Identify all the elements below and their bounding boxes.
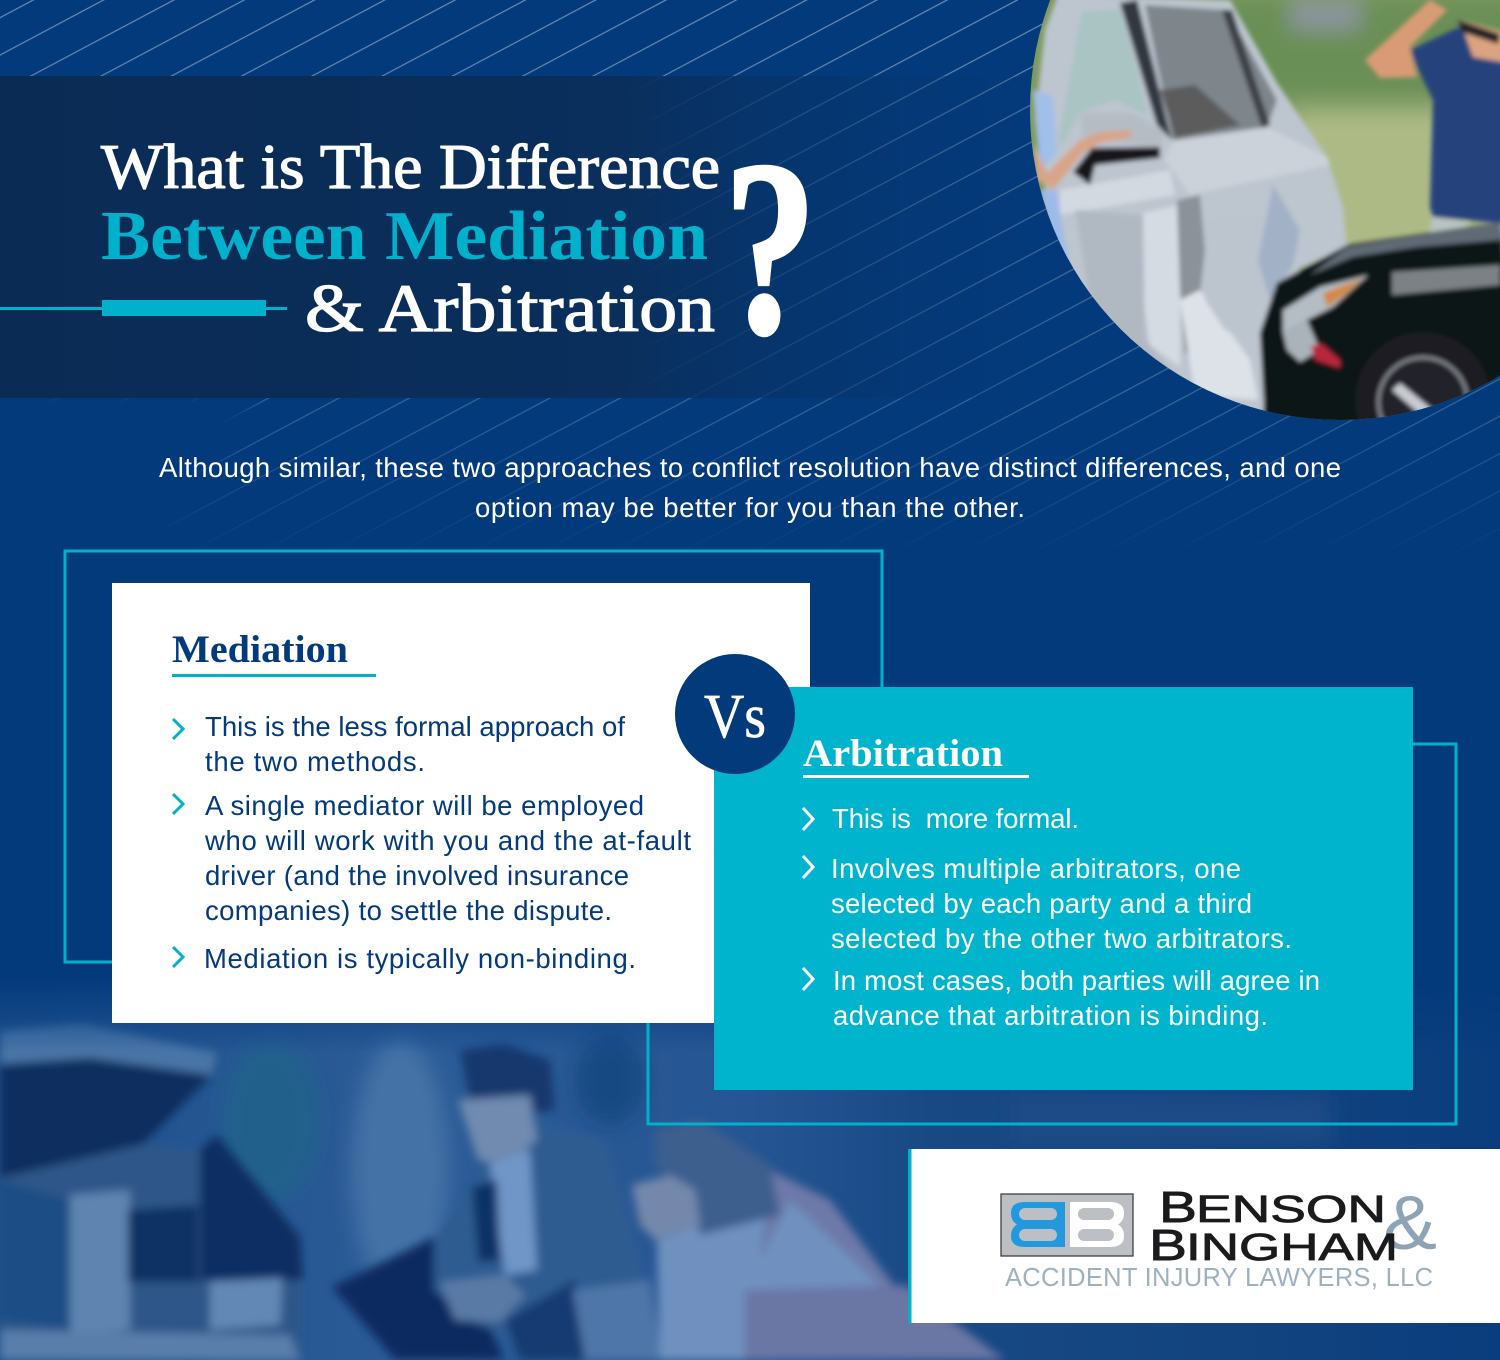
logo card bbox=[908, 1149, 1500, 1323]
woman: torso, scarf, hair, hand bbox=[652, 1198, 882, 1360]
logo wordmark: INGHAM bbox=[1186, 1227, 1398, 1269]
arbitration point 3: advance that arbitration is binding. bbox=[833, 1000, 1268, 1031]
intro text: option may be better for you than the other. bbox=[475, 492, 1025, 523]
mediation point 1: This is the less formal approach of bbox=[205, 711, 625, 742]
logo wordmark: B bbox=[1159, 1183, 1197, 1232]
mediation point 1: the two methods. bbox=[205, 746, 425, 777]
mediation point 2: driver (and the involved insurance bbox=[205, 860, 629, 891]
title line 1: What is The Difference bbox=[101, 132, 720, 202]
title line 2: Between Mediation bbox=[101, 198, 708, 275]
question mark: ? bbox=[724, 109, 816, 387]
panel: arbitration bbox=[714, 687, 1413, 1090]
woman at left bbox=[1033, 90, 1057, 170]
vs badge: Vs bbox=[704, 683, 766, 751]
silver car bbox=[1035, 0, 1347, 420]
mediation point 2: A single mediator will be employed bbox=[205, 790, 644, 821]
arbitration point 2: selected by each party and a third bbox=[831, 888, 1252, 919]
arbitration heading: Arbitration bbox=[803, 732, 1003, 775]
arbitration point 3 bbox=[803, 965, 1320, 1031]
frame: arbitration outline bbox=[648, 744, 1456, 1124]
intro text bbox=[159, 452, 1341, 523]
logo mark bbox=[1001, 1194, 1133, 1256]
side mirror bbox=[1082, 115, 1162, 146]
black car bbox=[1260, 222, 1500, 430]
diagonal line texture bbox=[0, 0, 1500, 560]
header band bbox=[0, 76, 1130, 398]
title accent bar bbox=[0, 300, 287, 316]
vs badge bbox=[675, 654, 795, 774]
frame: mediation outline bbox=[65, 551, 882, 962]
mediation point 2 bbox=[173, 790, 691, 926]
arbitration point 1: This is more formal. bbox=[832, 803, 1079, 834]
engine bay bbox=[0, 1145, 300, 1360]
logo wordmark: ENSON bbox=[1196, 1189, 1386, 1231]
mediation point 2: who will work with you and the at-fault bbox=[204, 825, 691, 856]
photo circle: car accident bbox=[1030, 0, 1500, 420]
mediation point 1 bbox=[173, 711, 625, 777]
mediation point 3: Mediation is typically non-binding. bbox=[204, 943, 636, 974]
clipboard bbox=[332, 1237, 504, 1360]
title bbox=[0, 109, 816, 387]
arbitration point 2: selected by the other two arbitrators. bbox=[831, 923, 1292, 954]
logo wordmark: B bbox=[1149, 1221, 1187, 1270]
mediation heading: Mediation bbox=[172, 628, 348, 671]
mediation point 2: companies) to settle the dispute. bbox=[205, 895, 612, 926]
panel: mediation bbox=[112, 583, 810, 1023]
raised hood bbox=[0, 1056, 211, 1180]
man: jacket, shirt, hair, face, hand, trousers bbox=[424, 1125, 638, 1347]
logo wordmark bbox=[1149, 1183, 1398, 1270]
logo tagline: ACCIDENT INJURY LAWYERS, LLC bbox=[1005, 1264, 1433, 1292]
arbitration point 2: Involves multiple arbitrators, one bbox=[831, 853, 1241, 884]
background photo: roadside accident scene bbox=[0, 975, 1500, 1360]
arbitration point 3: In most cases, both parties will agree in bbox=[833, 965, 1320, 996]
arbitration point 2 bbox=[803, 853, 1292, 954]
man in blue shirt bbox=[1410, 28, 1500, 225]
logo ampersand: & bbox=[1383, 1181, 1437, 1266]
intro text: Although similar, these two approaches to conflict resolution have distinct differences, and one bbox=[159, 452, 1341, 483]
title line 3: & Arbitration bbox=[305, 270, 715, 346]
